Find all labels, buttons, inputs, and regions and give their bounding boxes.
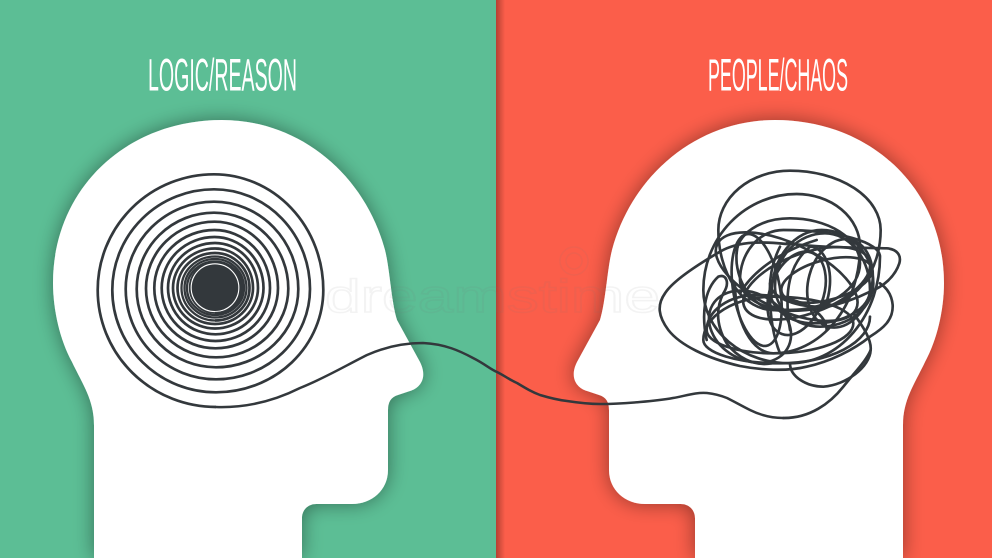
spiral inner ring — [190, 262, 240, 313]
panel edge shadow — [496, 0, 505, 558]
watermark: dreamstime — [325, 270, 660, 322]
connecting thread between heads — [216, 343, 783, 418]
spiral core — [192, 264, 238, 311]
panel: chaos background — [496, 0, 992, 558]
head silhouette: left — [53, 120, 423, 558]
watermark — [325, 247, 660, 322]
text: LOGIC/REASON — [148, 50, 297, 100]
panel: logic background — [0, 0, 496, 558]
spiral: ordered mind — [98, 174, 323, 407]
tangled scribble: chaotic mind — [660, 171, 900, 418]
head silhouette: right — [574, 120, 944, 558]
